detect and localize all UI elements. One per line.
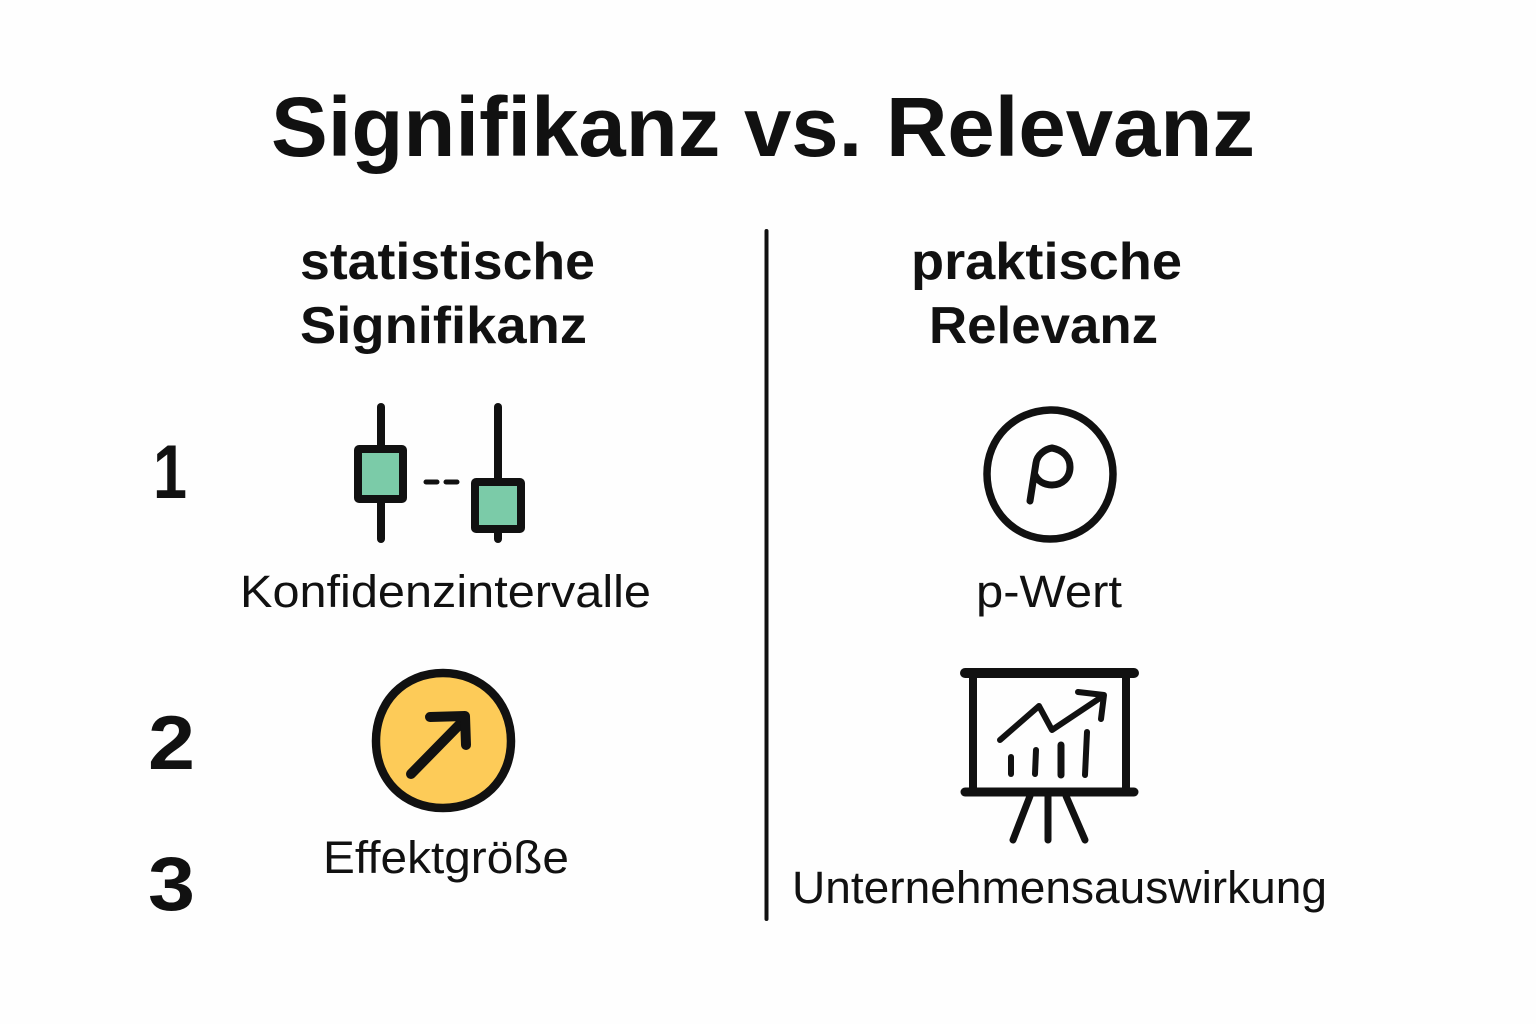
icon: effect size arrow — [376, 673, 511, 808]
heading: praktische Relevanz: Relevanz — [929, 297, 1158, 355]
row number 1: 1 — [153, 430, 187, 515]
divider line between columns — [764, 231, 768, 919]
heading: statistische Signifikanz: statistische — [300, 233, 595, 291]
label: Effektgröße: Effektgröße — [323, 832, 569, 883]
icon: confidence intervals — [358, 407, 521, 539]
heading: statistische Signifikanz — [300, 233, 595, 355]
row number 3: 3 — [148, 842, 195, 927]
row number 2: 2 — [148, 701, 195, 786]
label: p-Wert: p-Wert — [976, 566, 1123, 617]
label: Unternehmensauswirkung: Unternehmensauswirkung — [792, 862, 1327, 913]
heading: statistische Signifikanz: Signifikanz — [300, 297, 587, 355]
title: Signifikanz vs. Relevanz — [271, 80, 1255, 174]
icon: presentation board with chart — [965, 673, 1134, 840]
heading: praktische Relevanz: praktische — [911, 233, 1182, 291]
label: Konfidenzintervalle: Konfidenzintervalle — [240, 566, 651, 617]
icon: p-value circle — [987, 410, 1113, 539]
heading: praktische Relevanz — [911, 233, 1182, 355]
